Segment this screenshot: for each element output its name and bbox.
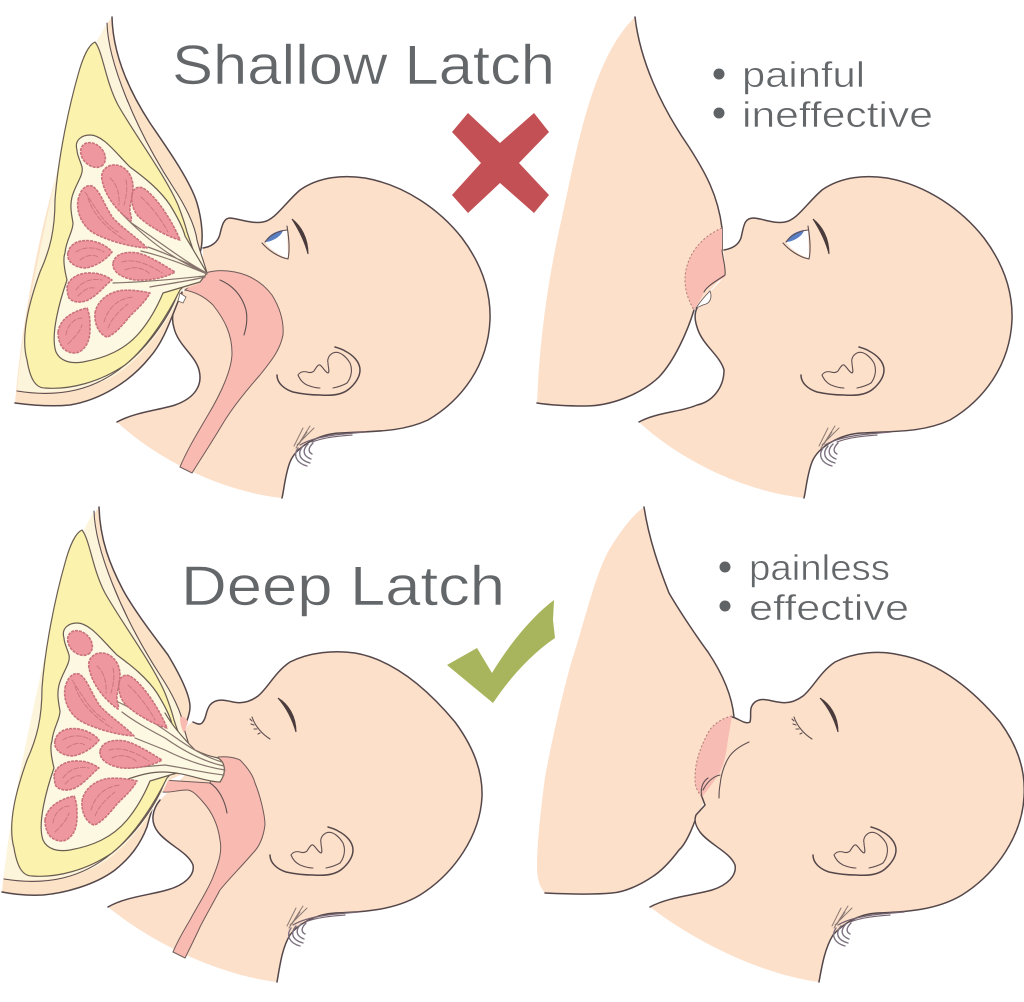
panel: deep latch cross-section bbox=[2, 507, 482, 982]
neck hair bbox=[287, 906, 359, 946]
panel: shallow latch cross-section bbox=[15, 17, 490, 498]
icon: green check mark bbox=[447, 600, 555, 703]
ear bbox=[801, 347, 884, 395]
eye bbox=[783, 219, 829, 259]
breast cross-section bbox=[2, 507, 225, 895]
eye bbox=[262, 219, 308, 259]
milk ducts reaching into the mouth bbox=[118, 702, 225, 782]
baby head with throat bbox=[108, 652, 482, 982]
title: shallow latch: Shallow Latch bbox=[172, 33, 555, 96]
panel: deep latch external view bbox=[537, 507, 1024, 982]
list: shallow latch effects: ineffective bbox=[742, 94, 933, 135]
throat bbox=[180, 271, 283, 473]
title: deep latch: Deep Latch bbox=[181, 554, 505, 617]
baby head bbox=[639, 177, 1012, 498]
neck hair bbox=[832, 906, 904, 946]
icon: red cross bbox=[452, 113, 549, 213]
baby head with throat bbox=[117, 177, 490, 498]
neck hair bbox=[294, 426, 366, 466]
list: shallow latch effects: painful bbox=[742, 54, 865, 95]
ear bbox=[270, 827, 353, 875]
list: shallow latch effects bbox=[714, 54, 933, 135]
areola in mouth bbox=[685, 228, 725, 310]
throat bbox=[158, 757, 265, 958]
baby head bbox=[650, 652, 1024, 982]
panel: shallow latch external view bbox=[537, 17, 1012, 498]
ear bbox=[813, 827, 896, 875]
breast bbox=[537, 507, 734, 894]
neck hair bbox=[819, 426, 891, 466]
breast cross-section bbox=[15, 17, 207, 406]
list: deep latch effects: effective bbox=[749, 587, 909, 628]
closed eye bbox=[250, 698, 296, 739]
breast bbox=[537, 17, 725, 406]
closed eye bbox=[792, 698, 838, 739]
areola in mouth bbox=[695, 716, 732, 797]
list: deep latch effects bbox=[720, 547, 909, 628]
list: deep latch effects: painless bbox=[749, 547, 890, 588]
ear bbox=[277, 347, 360, 395]
